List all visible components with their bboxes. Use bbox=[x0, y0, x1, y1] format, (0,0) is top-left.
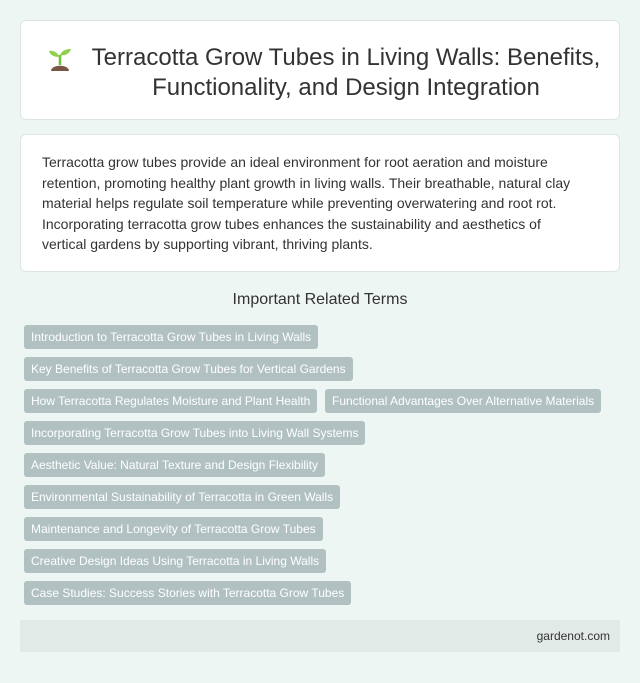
tag 1: Introduction to Terracotta Grow Tubes in Living Walls bbox=[31, 330, 311, 344]
tag 10 bbox=[24, 581, 351, 605]
tag 10: Case Studies: Success Stories with Terracotta Grow Tubes bbox=[31, 586, 344, 600]
tag 2 bbox=[24, 357, 353, 381]
tag 9: Creative Design Ideas Using Terracotta in Living Walls bbox=[31, 554, 319, 568]
tag 8 bbox=[24, 517, 323, 541]
title: Terracotta Grow Tubes in Living Walls: Benefits, Functionality, and Design Integration bbox=[92, 44, 600, 101]
tag 1 bbox=[24, 325, 318, 349]
icon: seedling bbox=[49, 49, 71, 71]
tag 4: Functional Advantages Over Alternative Materials bbox=[332, 394, 594, 408]
footer source: gardenot.com bbox=[537, 629, 610, 643]
tag 8: Maintenance and Longevity of Terracotta Grow Tubes bbox=[31, 522, 316, 536]
tag 5: Incorporating Terracotta Grow Tubes into Living Wall Systems bbox=[31, 426, 358, 440]
footer bbox=[20, 620, 620, 652]
terms list bbox=[24, 325, 601, 605]
tag 6: Aesthetic Value: Natural Texture and Design Flexibility bbox=[31, 458, 318, 472]
tag 2: Key Benefits of Terracotta Grow Tubes for Vertical Gardens bbox=[31, 362, 346, 376]
tag 4 bbox=[325, 389, 601, 413]
description panel bbox=[20, 134, 620, 272]
tag 3: How Terracotta Regulates Moisture and Plant Health bbox=[31, 394, 310, 408]
tag 9 bbox=[24, 549, 326, 573]
tag 3 bbox=[24, 389, 317, 413]
header panel bbox=[20, 20, 620, 120]
tag 7: Environmental Sustainability of Terracotta in Green Walls bbox=[31, 490, 333, 504]
tag 7 bbox=[24, 485, 340, 509]
description text: Terracotta grow tubes provide an ideal environment for root aeration and moisture retention, promoting healthy plant growth in living walls. Their breathable, natural clay material helps regulate soil temperature while preventing overwatering and root rot. Incorporating terracotta grow tubes enhances the sustainability and aesthetics of vertical gardens by supporting vibrant, thriving plants. bbox=[42, 154, 570, 252]
terms heading: Important Related Terms bbox=[233, 291, 407, 308]
tag 6 bbox=[24, 453, 325, 477]
tag 5 bbox=[24, 421, 365, 445]
